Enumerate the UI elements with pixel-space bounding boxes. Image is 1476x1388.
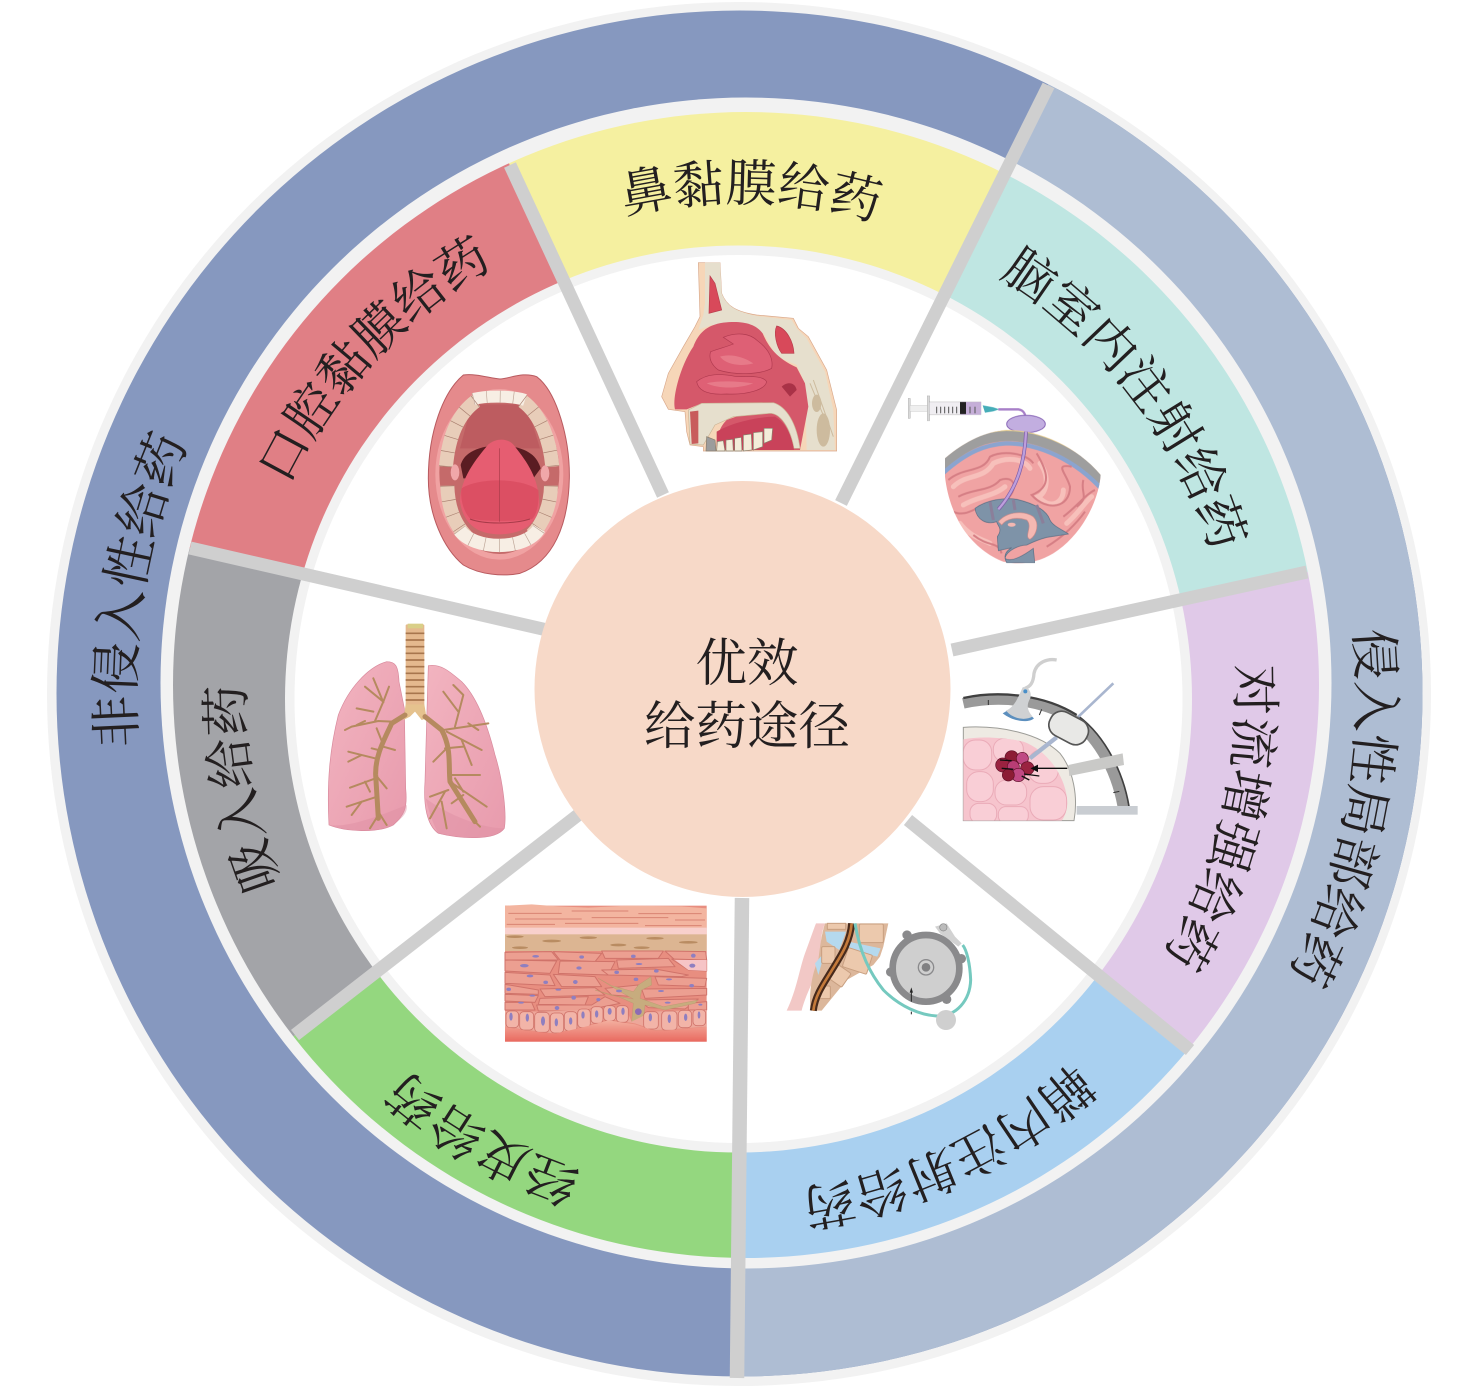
basal cells <box>505 1007 707 1033</box>
teeth <box>446 397 552 545</box>
icon: nasal cavity anatomy <box>662 263 837 451</box>
segment: CED <box>1102 572 1319 1044</box>
segment: ventricular <box>950 176 1308 594</box>
ultrasound probe <box>1003 709 1034 721</box>
inner white disc <box>294 255 1182 1143</box>
label: invasive local: 侵入性局部给药 <box>1291 630 1401 990</box>
label: non-invasive: 非侵入性给药 <box>90 430 186 745</box>
ventricle <box>975 499 1068 563</box>
spoke 1 <box>841 86 1048 503</box>
spoke 5 <box>295 815 578 1035</box>
tonsils <box>451 464 459 480</box>
center title: 给药途径 <box>644 699 850 756</box>
bronchi <box>345 678 488 828</box>
brain dome <box>945 430 1101 564</box>
spoke 4 <box>737 898 742 1378</box>
needle <box>1030 737 1057 758</box>
icon: convection enhanced delivery <box>963 660 1138 823</box>
label: CED: 对流增强给药 <box>1166 666 1280 973</box>
segment: transdermal <box>294 977 732 1258</box>
center disc <box>534 481 950 897</box>
catheter <box>998 432 1026 509</box>
icon: intrathecal pump <box>787 923 971 1030</box>
icon: ventricular injection <box>908 396 1107 567</box>
segment: intrathecal <box>746 980 1184 1258</box>
band between outer and middle ring <box>160 98 1332 1268</box>
spoke 2 <box>952 572 1307 650</box>
middle ring: delivery routes <box>173 112 1319 1258</box>
icon: lungs <box>328 624 505 838</box>
inner pale band <box>285 246 1192 1152</box>
trachea <box>406 624 424 706</box>
dendritic cell <box>595 977 698 1022</box>
segment: inhalation <box>173 548 372 1036</box>
nuclei <box>506 954 702 1010</box>
outer segment: invasive local <box>744 84 1422 1376</box>
segment: oral mucosa <box>190 163 558 568</box>
label: nasal: 鼻黏膜给药 <box>624 159 883 222</box>
spoke 3 <box>908 820 1190 1050</box>
label: transdermal: 经皮给药 <box>384 1074 578 1207</box>
icon: open mouth <box>428 375 569 575</box>
label: ventricular: 脑室内注射给药 <box>998 244 1248 546</box>
label: inhalation: 吸入给药 <box>201 688 280 894</box>
icon: skin layers <box>505 904 707 1042</box>
spoke 6 <box>190 548 547 630</box>
spokes <box>190 86 1307 1378</box>
spoke 7 <box>510 165 663 495</box>
center title <box>644 636 850 756</box>
label: oral mucosa: 口腔黏膜给药 <box>259 235 487 480</box>
tumor <box>996 751 1034 782</box>
center title: 优效 <box>695 636 799 693</box>
syringe <box>908 396 999 421</box>
bars <box>1068 753 1124 776</box>
tongue <box>460 440 539 534</box>
label: intrathecal: 鞘内注射给药 <box>808 1067 1097 1230</box>
segment: nasal <box>509 112 999 292</box>
